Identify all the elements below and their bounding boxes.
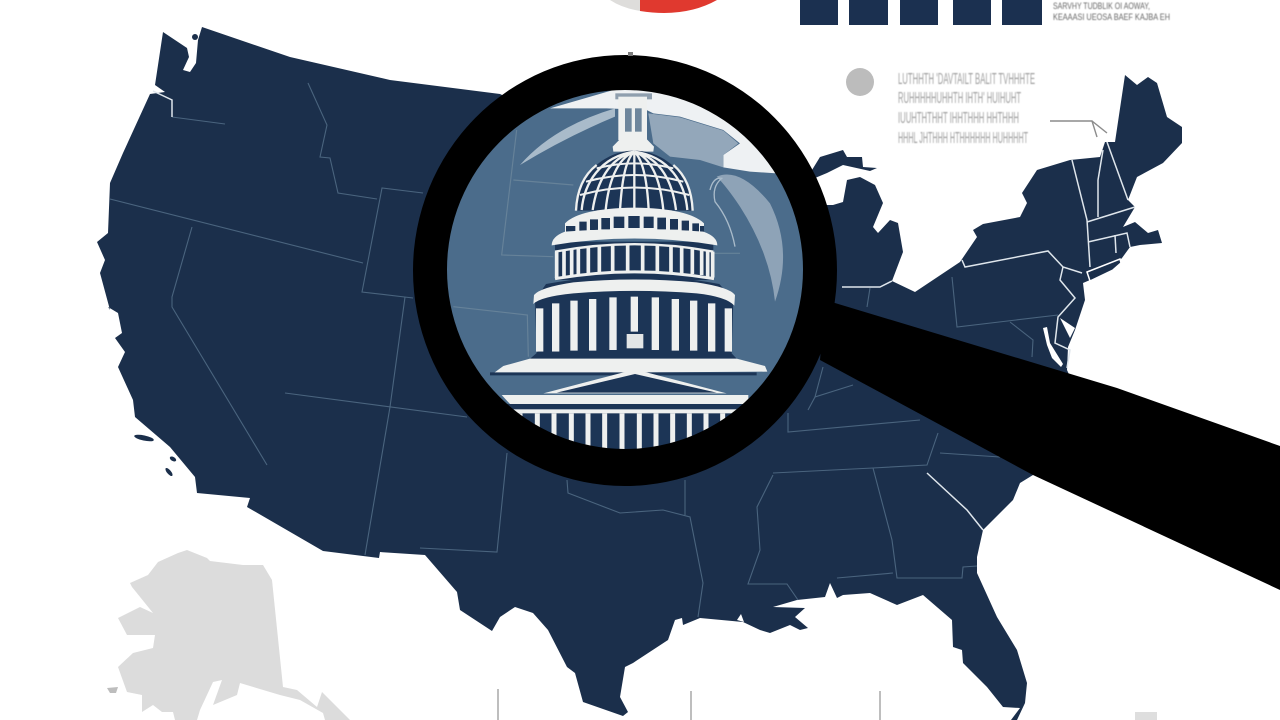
capitol: pediment — [544, 372, 726, 394]
lens: map borders — [453, 130, 740, 356]
legend text block — [898, 71, 1035, 147]
magnifying glass lens view — [440, 85, 820, 455]
map: Puget Sound island — [192, 34, 198, 40]
magnifying glass handle — [820, 300, 1280, 590]
bottom tick marks — [498, 689, 880, 720]
capitol: entablature and portico — [502, 395, 748, 451]
map: Alaska — [107, 550, 350, 720]
callout leader line — [1050, 121, 1107, 137]
capitol: lantern — [613, 93, 654, 152]
infographic canvas: LUTHHTH 'DAVTAILT BALIT TVHHHTE — [898, 71, 1035, 88]
map: Long Island — [1087, 259, 1121, 281]
lens top finial — [628, 52, 633, 56]
map: Michigan upper peninsula — [812, 150, 877, 178]
pie chart fragment — [610, 0, 717, 13]
capitol: window drum — [565, 208, 704, 233]
lens: reflected light area — [648, 113, 738, 167]
capitol: cornice — [493, 359, 767, 373]
capitol: upper colonnade — [552, 229, 717, 280]
legend text block: IUUHTHTHHT IHHTHHH HHTHHH — [898, 110, 1019, 127]
map: northeast state borders — [153, 91, 1135, 530]
lens: right crescent glare — [717, 175, 783, 302]
map: coastal inlets — [737, 318, 1075, 622]
legend dot — [846, 68, 874, 96]
lens: white coast — [550, 87, 777, 173]
bar chart fragment — [800, 0, 1042, 25]
map: California islands — [134, 433, 177, 477]
capitol: main colonnade — [529, 276, 737, 359]
lens: upper left glare — [520, 108, 615, 165]
legend text block: RUHHHHHUHHTH IHTH' HUIHUHT — [898, 90, 1021, 107]
map: inland state borders — [110, 83, 1058, 617]
magnifying glass ring — [413, 55, 837, 486]
top right caption: SARVHY TUDBLIK OI AOWAY, — [1053, 1, 1150, 11]
bottom right fragment — [1135, 712, 1157, 720]
infographic canvas: HHHL JHTHHH HTHHHHHH HUHHHHT — [898, 130, 1028, 147]
capitol building — [490, 93, 767, 451]
top right caption: KEAAASI UEOSA BAEF KAJBA EH — [1053, 12, 1170, 22]
top right caption — [1053, 1, 1170, 22]
capitol: dome — [576, 151, 693, 211]
